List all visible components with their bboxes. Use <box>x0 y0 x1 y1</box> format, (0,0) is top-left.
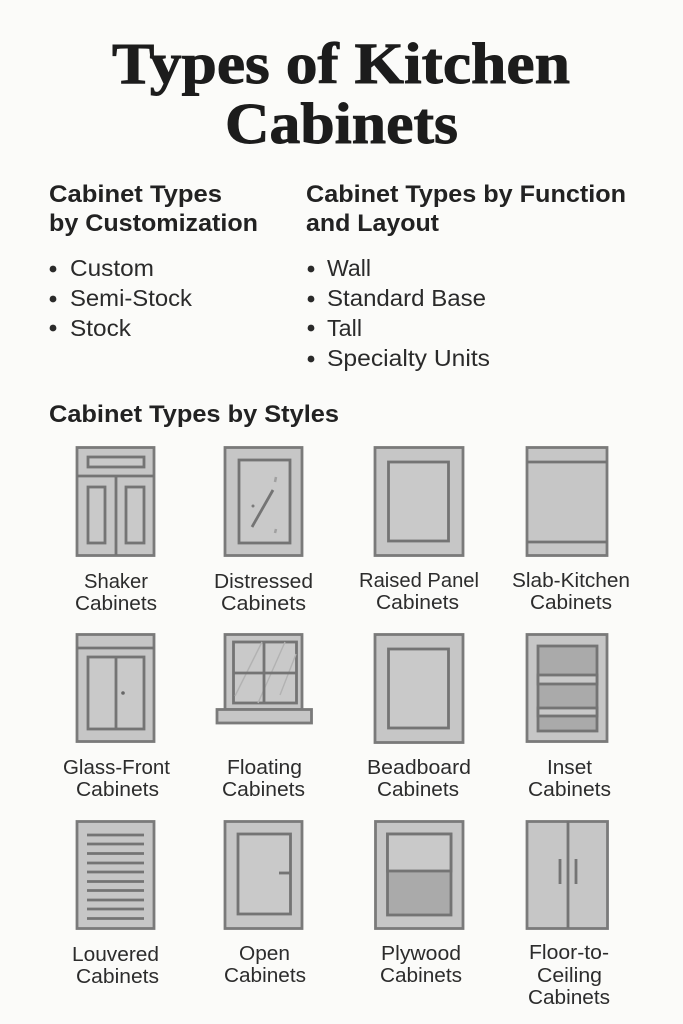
title: Cabinets <box>225 91 458 156</box>
heading: by customization: Cabinet Types <box>49 181 222 208</box>
icon: raised panel cabinet <box>375 448 463 556</box>
title <box>112 31 570 156</box>
icon: floor-to-ceiling cabinet <box>527 821 608 928</box>
list: function and layout types: Wall <box>327 255 371 281</box>
label: plywood <box>380 943 462 987</box>
heading: by customization <box>49 181 258 237</box>
heading: cabinet types by styles: Cabinet Types by Styles <box>49 401 339 428</box>
heading: by function and layout: Cabinet Types by Function <box>306 181 626 208</box>
label: raised panel <box>359 570 479 614</box>
label: floating <box>222 757 305 801</box>
card: glass-front cabinets <box>63 634 170 801</box>
label: shaker <box>75 571 157 615</box>
icon: plywood cabinet <box>376 822 463 928</box>
label: floating: Cabinets <box>222 779 305 801</box>
label: plywood: Cabinets <box>380 965 462 987</box>
icon: floating cabinet with sill <box>217 634 312 723</box>
label: glass-front: Cabinets <box>76 779 159 801</box>
list: customization types: Stock <box>70 315 132 341</box>
card: plywood cabinets <box>376 822 463 987</box>
label: louvered: Cabinets <box>76 966 159 988</box>
icon: inset cabinet <box>527 634 607 742</box>
list: function and layout types <box>308 255 490 371</box>
label: shaker: Cabinets <box>75 593 157 615</box>
label: slab-kitchen: Cabinets <box>530 592 612 614</box>
list: function and layout types: Tall <box>327 315 362 341</box>
heading: by customization: by Customization <box>49 210 258 237</box>
card: louvered cabinets <box>72 822 159 988</box>
card: open cabinets <box>224 822 306 987</box>
heading: by function and layout <box>306 181 626 237</box>
card: slab-kitchen cabinets <box>512 448 630 614</box>
card: inset cabinets <box>527 634 611 801</box>
icon: slab cabinet <box>527 448 607 556</box>
panel: cabinet types by function and layout <box>306 181 626 371</box>
icon: beadboard cabinet <box>375 634 463 742</box>
card: floating cabinets <box>217 634 312 801</box>
label: slab-kitchen <box>512 570 630 614</box>
panel: style grid <box>63 448 630 1009</box>
card: raised panel cabinets <box>359 448 479 614</box>
card: floor-to-ceiling cabinets <box>527 821 610 1009</box>
label: glass-front <box>63 757 170 801</box>
label: distressed: Cabinets <box>221 593 306 615</box>
label: shaker: Shaker <box>84 571 148 593</box>
title: Types of Kitchen <box>112 31 570 96</box>
label: inset: Cabinets <box>528 779 611 801</box>
label: open: Open <box>239 943 290 965</box>
icon: open cabinet <box>225 822 302 928</box>
icon: distressed cabinet <box>225 448 302 556</box>
list: customization types: Semi-Stock <box>70 285 193 311</box>
label: floor-to-ceiling: Cabinets <box>528 987 610 1009</box>
label: open: Cabinets <box>224 965 306 987</box>
label: raised panel: Raised Panel <box>359 570 479 592</box>
label: distressed: Distressed <box>214 571 313 593</box>
label: inset: Inset <box>547 757 592 779</box>
icon: louvered cabinet <box>77 822 154 928</box>
label: floating: Floating <box>227 757 302 779</box>
icon: glass-front cabinet <box>77 634 154 742</box>
label: beadboard: Beadboard <box>367 757 471 779</box>
label: open <box>224 943 306 987</box>
label: floor-to-ceiling: Floor-to- <box>529 942 609 964</box>
label: louvered: Louvered <box>72 944 159 966</box>
list: function and layout types: Specialty Units <box>327 345 490 371</box>
panel: cabinet types by customization <box>49 181 258 341</box>
label: beadboard: Cabinets <box>377 779 459 801</box>
label: floor-to-ceiling <box>528 942 610 1009</box>
list: customization types: Custom <box>70 255 154 281</box>
label: beadboard <box>367 757 471 801</box>
label: floor-to-ceiling: Ceiling <box>537 965 602 987</box>
label: glass-front: Glass-Front <box>63 757 170 779</box>
heading: by function and layout: and Layout <box>306 210 439 237</box>
label: slab-kitchen: Slab-Kitchen <box>512 570 630 592</box>
card: shaker cabinets <box>75 448 157 615</box>
label: plywood: Plywood <box>381 943 461 965</box>
label: raised panel: Cabinets <box>376 592 459 614</box>
card: beadboard cabinets <box>367 634 471 801</box>
icon: shaker cabinet <box>77 448 154 556</box>
list: function and layout types: Standard Base <box>327 285 486 311</box>
label: louvered <box>72 944 159 988</box>
card: distressed cabinets <box>214 448 313 615</box>
label: distressed <box>214 571 313 615</box>
list: customization types <box>50 255 193 341</box>
label: inset <box>528 757 611 801</box>
